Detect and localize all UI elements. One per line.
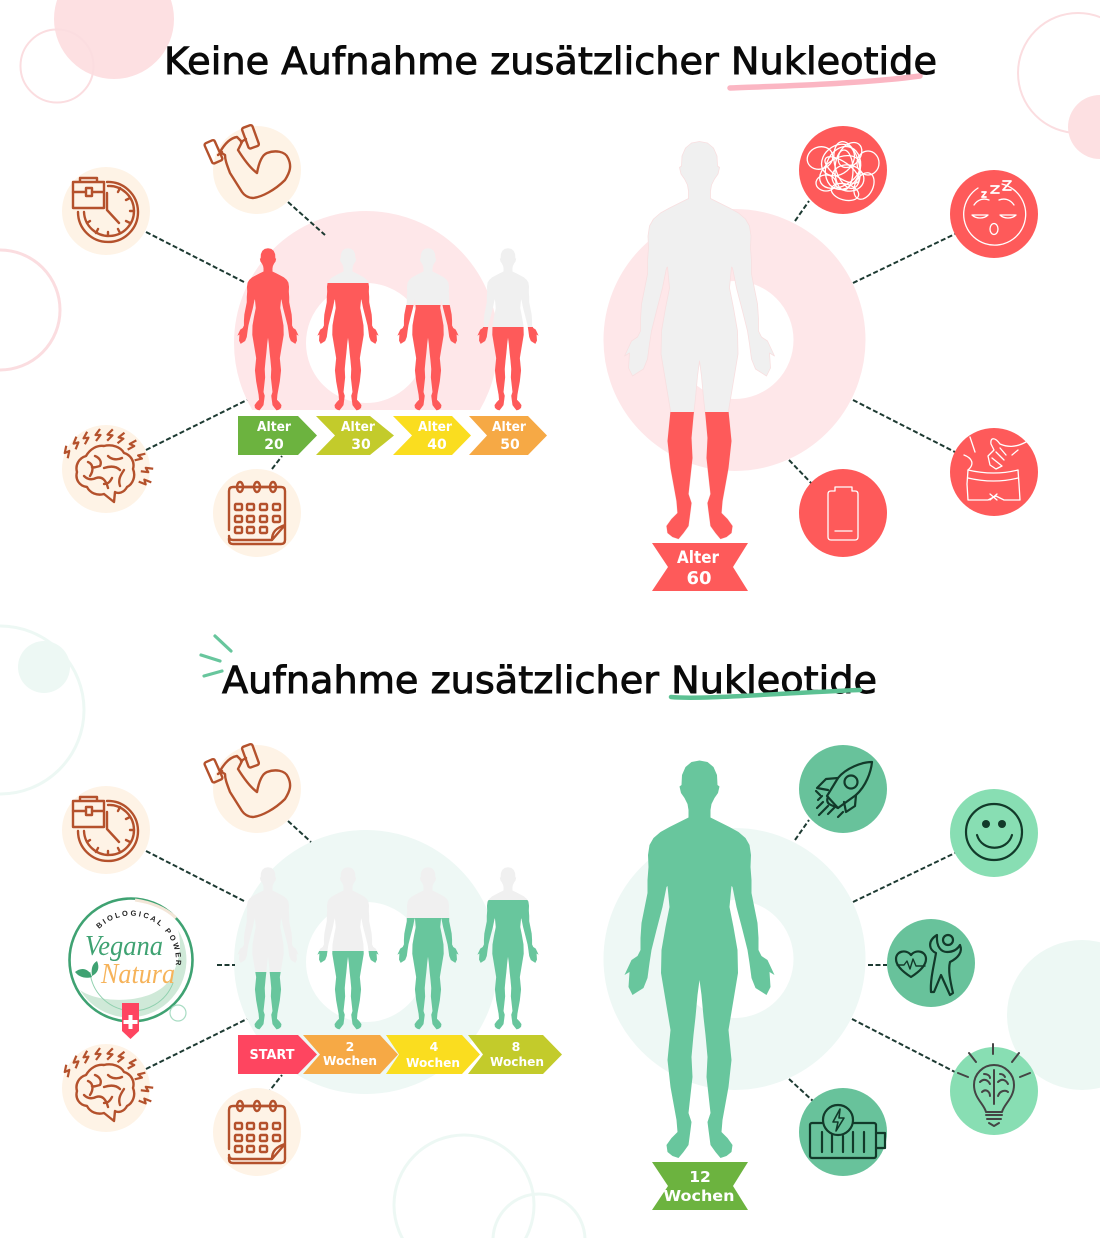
icon: calendar xyxy=(213,469,301,557)
logo: Vegana Natura: Vegana xyxy=(85,930,163,962)
arrow: Alter 50: Alter xyxy=(492,420,527,435)
background decoration: pink circles xyxy=(0,0,1100,370)
arrow: Alter 20: 20 xyxy=(264,437,284,453)
logo: Vegana Natura xyxy=(68,897,194,1039)
arrow: 2 Wochen xyxy=(303,1035,398,1074)
arrow: 4 Wochen xyxy=(386,1035,480,1074)
arrow: Alter 20: Alter xyxy=(257,420,292,435)
icon: sleepy face xyxy=(950,170,1038,258)
arrow: Alter 30: Alter xyxy=(341,420,376,435)
figure: 4 weeks xyxy=(398,918,458,1030)
icon: clock and briefcase xyxy=(62,786,150,874)
icon: tangled thoughts xyxy=(799,126,887,214)
connectors xyxy=(789,201,955,485)
icon: strong arm xyxy=(204,744,301,833)
icon: heart and active figure xyxy=(887,919,975,1007)
ribbon: 12 Wochen: Wochen xyxy=(664,1187,734,1205)
arrow: 4 Wochen: 4 xyxy=(430,1039,439,1054)
arrow: Alter 50 xyxy=(469,416,547,455)
icon: brain light bulb xyxy=(950,1044,1038,1135)
donut: right background xyxy=(640,245,830,435)
arrow: 8 Wochen: 8 xyxy=(512,1039,520,1054)
icon: strong arm xyxy=(204,125,301,214)
connectors xyxy=(789,820,955,1101)
figure: age 50 xyxy=(477,248,539,410)
arrow: 8 Wochen: Wochen xyxy=(490,1054,544,1069)
icon: smiley xyxy=(950,789,1038,877)
accent marks xyxy=(201,636,231,676)
arrow: Alter 30: 30 xyxy=(351,437,371,453)
arrow: Alter 30 xyxy=(316,416,394,455)
ribbon: Alter 60: Alter xyxy=(677,548,720,567)
title: with nucleotides: Aufnahme zusätzlicher Nukleotide xyxy=(222,659,877,702)
connectors xyxy=(146,202,325,469)
arrow: Alter 40: Alter xyxy=(418,420,453,435)
donut: left background green xyxy=(270,866,462,1058)
arrow: Alter 20 xyxy=(238,416,317,455)
arrow: START xyxy=(238,1035,317,1074)
figure: age 40 xyxy=(397,248,459,410)
panel: ageing decline xyxy=(62,125,547,557)
panel: age 60 symptoms xyxy=(624,126,1038,591)
logo: Vegana Natura: Natura xyxy=(100,958,175,990)
icon: rocket xyxy=(799,745,887,833)
arrow: Alter 40 xyxy=(393,416,471,455)
icon: charged battery xyxy=(799,1088,887,1176)
figure: age 60 xyxy=(624,142,774,539)
icon: clock and briefcase xyxy=(62,167,150,255)
arrow: Alter 40: 40 xyxy=(427,437,447,453)
ribbon: Alter 60 xyxy=(652,543,748,591)
icon: stomach ache xyxy=(950,428,1038,516)
donut: right background green xyxy=(640,864,830,1054)
panel: 12 weeks benefits xyxy=(624,745,1038,1210)
logo: Vegana Natura: BIOLOGICAL POWER xyxy=(96,910,182,965)
connectors xyxy=(146,821,311,1094)
arrow: 4 Wochen: Wochen xyxy=(406,1055,460,1070)
arrow: 8 Wochen xyxy=(468,1035,562,1074)
figure: age 30 xyxy=(317,248,379,410)
figure: 8 weeks xyxy=(477,867,539,1029)
arrow: 2 Wochen: Wochen xyxy=(323,1053,377,1068)
ribbon: 12 Wochen: 12 xyxy=(689,1168,711,1186)
arrow: START: START xyxy=(250,1047,295,1063)
background decoration: green circles xyxy=(0,626,1100,1238)
week timeline xyxy=(238,1035,562,1074)
arrow: Alter 50: 50 xyxy=(500,437,520,453)
age timeline xyxy=(238,416,547,455)
panel: recovery timeline xyxy=(62,743,562,1176)
figures: start to 8 weeks xyxy=(237,867,539,1029)
icon: brain xyxy=(62,425,153,513)
donut: left background xyxy=(270,247,462,439)
figure: start xyxy=(248,868,282,1030)
icon: empty battery xyxy=(799,469,887,557)
figures: ages 20 to 50 xyxy=(237,248,539,410)
title: without nucleotides: Keine Aufnahme zusätzlicher Nukleotide xyxy=(164,40,937,83)
icon: calendar xyxy=(213,1088,301,1176)
figure: 12 weeks xyxy=(624,760,774,1158)
icon: brain xyxy=(62,1044,153,1132)
figure: age 20 xyxy=(237,248,299,410)
arrow: 2 Wochen: 2 xyxy=(346,1039,354,1054)
ribbon: Alter 60: 60 xyxy=(686,568,712,589)
figure: 2 weeks xyxy=(318,902,378,1030)
ribbon: 12 Wochen xyxy=(652,1162,748,1210)
